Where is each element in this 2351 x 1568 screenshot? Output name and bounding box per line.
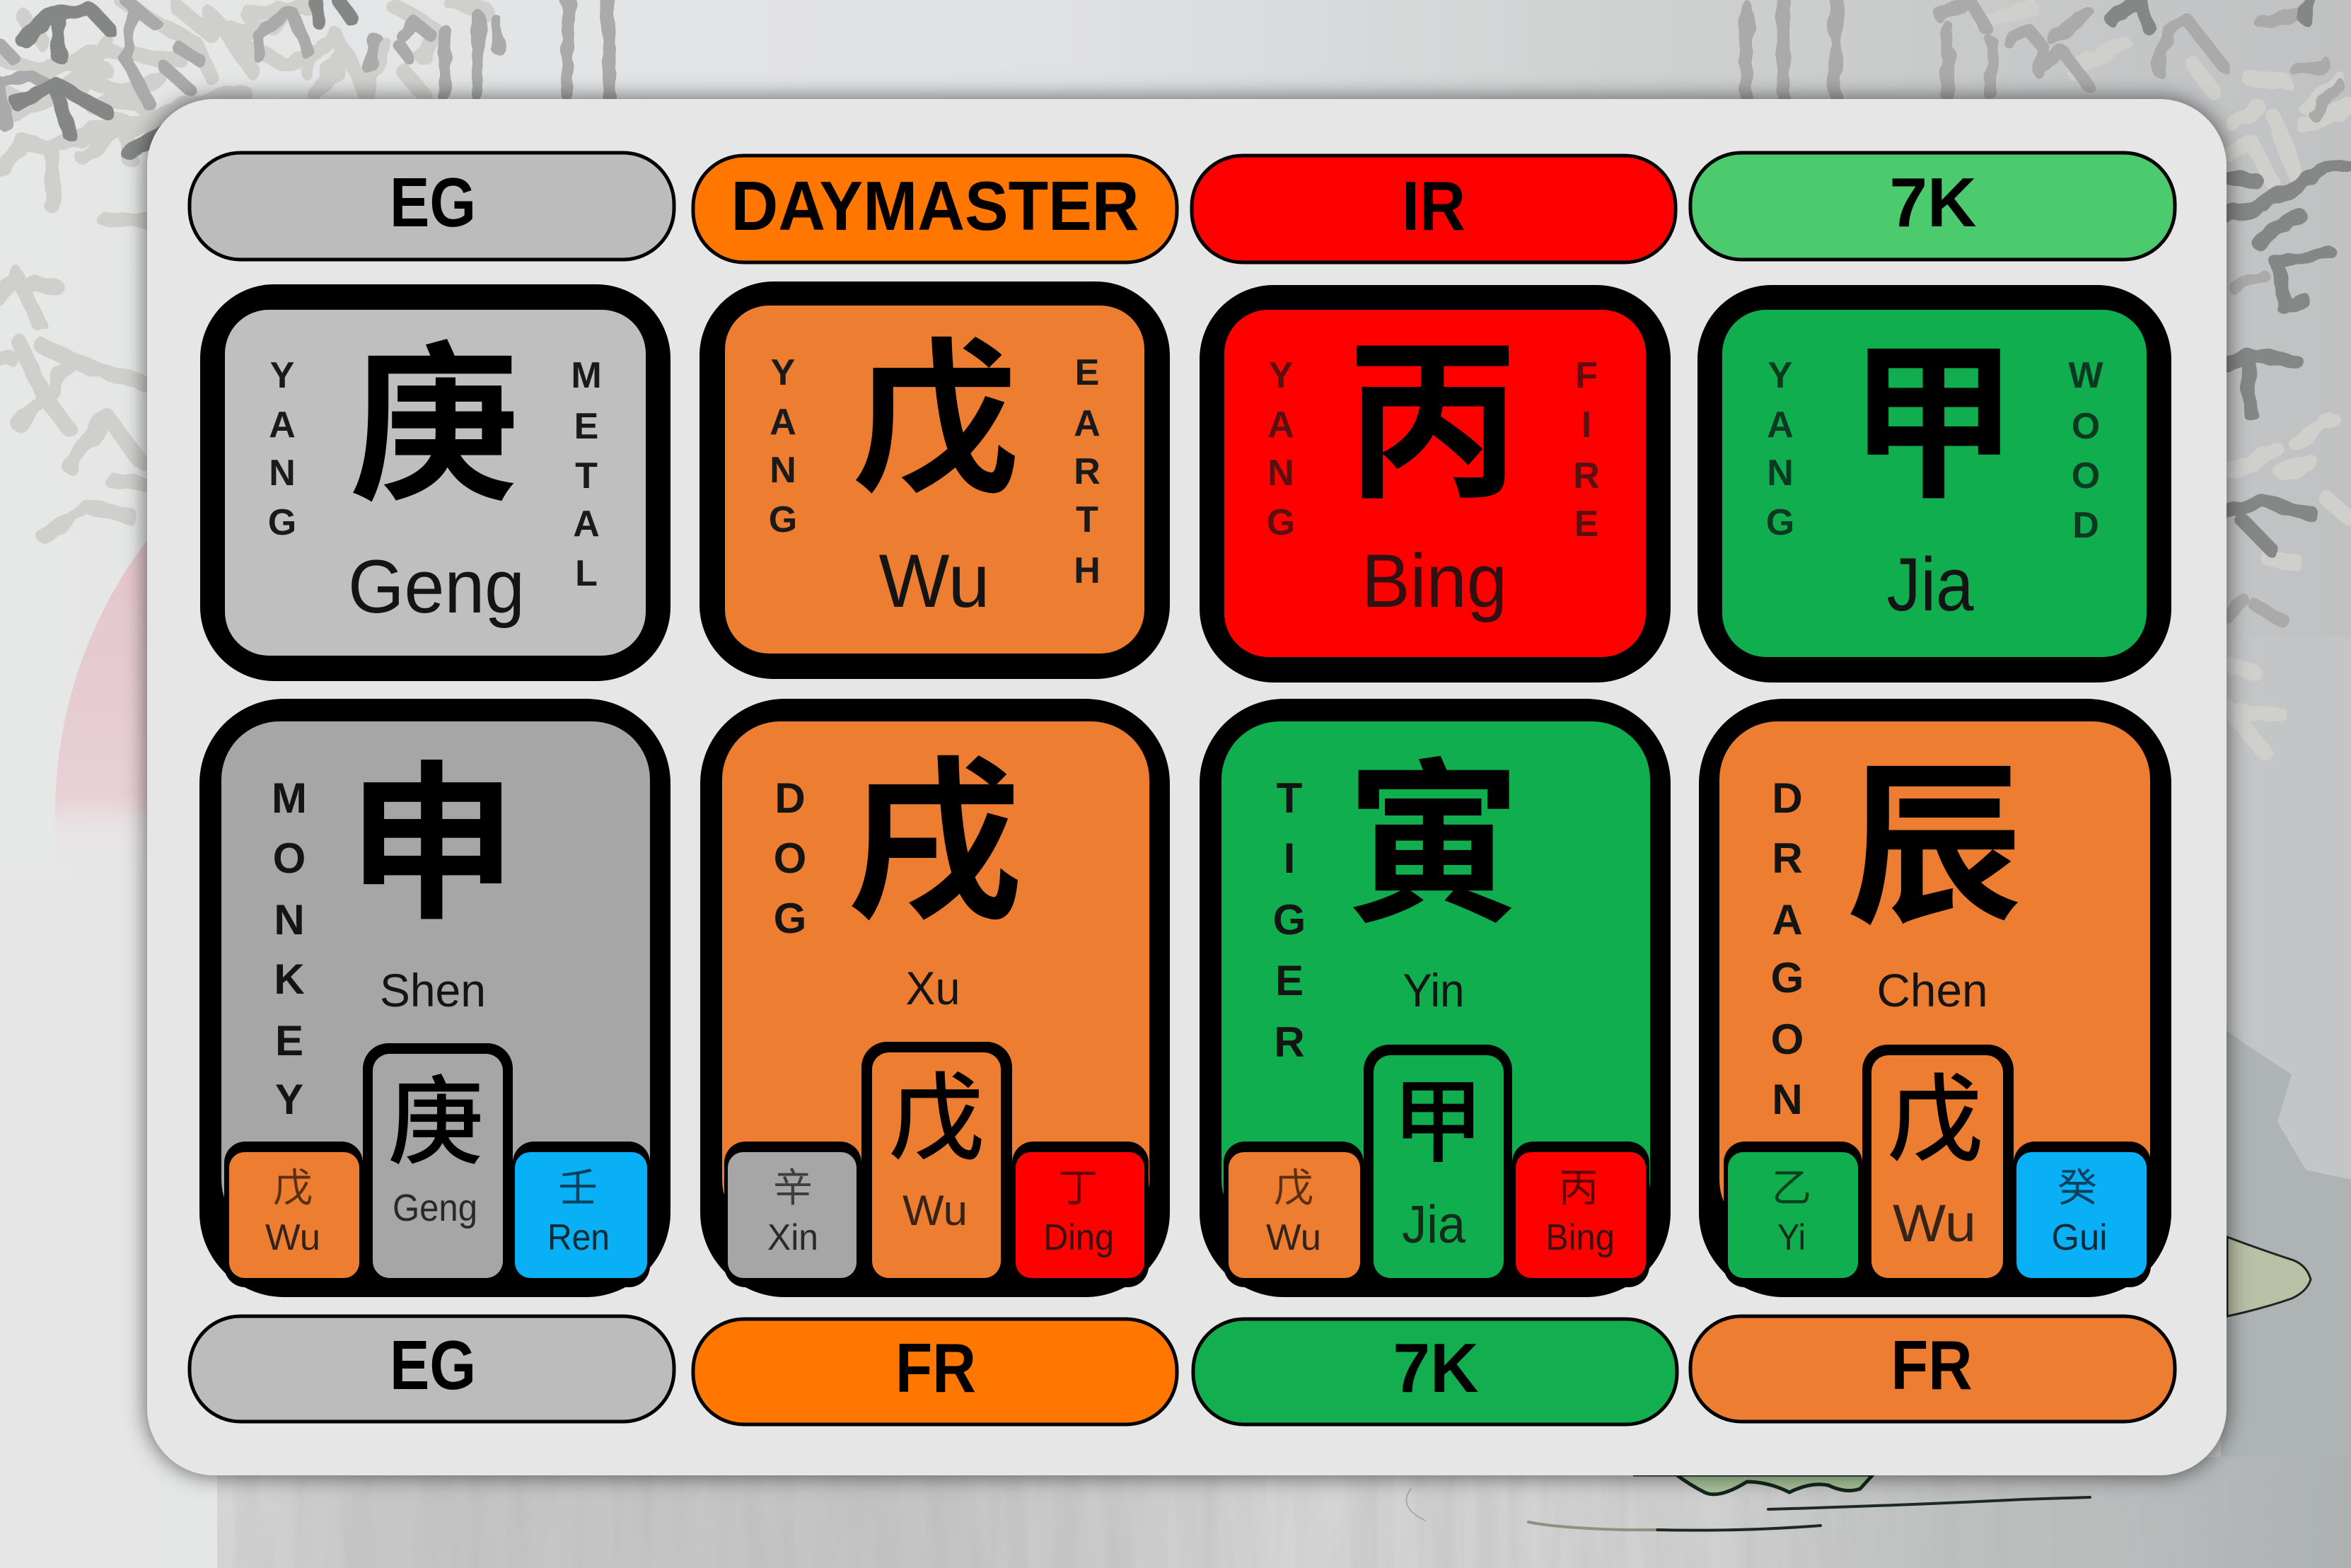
- hidden stem: Yi: [1724, 1142, 1862, 1287]
- top card: Jia: Jia: [1887, 542, 1974, 627]
- hidden stem: Ren: [513, 1142, 650, 1287]
- label: FR: [693, 1319, 1177, 1424]
- label: EG: EG: [390, 1326, 476, 1404]
- hidden stem: Jia: 甲: [1392, 1048, 1484, 1181]
- hidden stem: Ding: [1012, 1142, 1149, 1287]
- top card: Bing: FIRE: [1573, 355, 1600, 545]
- label: FR: FR: [895, 1329, 976, 1407]
- top card: Jia: YANG: [1766, 355, 1794, 543]
- top card: Bing: YANG: [1267, 355, 1295, 543]
- hidden stem: Wu: Wu: [902, 1187, 968, 1234]
- hidden stem: Gui: 癸: [2057, 1156, 2097, 1214]
- top card: Jia: 甲: [1848, 287, 2018, 533]
- top card: Geng: METAL: [571, 355, 602, 594]
- label: 7K: [1193, 1319, 1677, 1424]
- hidden stem: Jia: Jia: [1402, 1195, 1465, 1254]
- top card: Wu: YANG: [769, 352, 797, 540]
- top card: Wu: Wu: [878, 538, 990, 623]
- label: EG: [190, 153, 674, 260]
- top card: Geng: YANG: [268, 355, 296, 543]
- label: FR: [1690, 1316, 2175, 1422]
- bottom card: Shen: [199, 699, 671, 1297]
- hidden stem: Wu: 戊: [1274, 1156, 1313, 1214]
- hidden stem: Gui: [2014, 1142, 2151, 1287]
- hidden stem: Wu: [1862, 1042, 2014, 1287]
- hidden stem: Bing: 丙: [1559, 1156, 1598, 1214]
- top card: Wu: 戊: [852, 284, 1019, 526]
- lotus leaf at bottom: [1633, 1475, 1873, 1494]
- bottom card: Xu: [700, 699, 1170, 1297]
- top card: Jia: [1697, 285, 2171, 683]
- hidden stem: Jia: [1364, 1045, 1512, 1287]
- bottom card: Yin: [1200, 699, 1671, 1297]
- bottom card: Shen: Shen: [380, 964, 486, 1016]
- bottom card: Yin: 寅: [1346, 704, 1521, 958]
- hidden stem: Ren: 壬: [558, 1156, 598, 1214]
- hidden stem: Yi: 乙: [1772, 1156, 1811, 1214]
- water ripple strokes: [1406, 1489, 2090, 1531]
- hidden stem: Geng: 庚: [388, 1045, 484, 1184]
- bottom card: Chen: 辰: [1847, 705, 2022, 959]
- bottom card: Chen: DRAGON: [1771, 774, 1804, 1123]
- hidden stem: Wu: [861, 1040, 1012, 1287]
- label: FR: FR: [1891, 1326, 1972, 1404]
- hidden stem: Wu: 戊: [1887, 1042, 1983, 1180]
- label: 7K: [1690, 153, 2175, 260]
- label: IR: IR: [1402, 167, 1465, 245]
- hidden stem: Geng: [363, 1043, 513, 1287]
- bottom card: Yin: TIGER: [1273, 774, 1306, 1066]
- bottom card: Xu: 戌: [847, 701, 1022, 955]
- top card: Wu: EARTH: [1074, 352, 1101, 591]
- bamboo foliage, mid layer: [0, 0, 2339, 620]
- bottom card: Shen: 申: [347, 708, 517, 953]
- hidden stem: Wu: Wu: [265, 1217, 320, 1258]
- label: 7K: 7K: [1890, 163, 1976, 241]
- bottom card: Chen: [1699, 699, 2171, 1297]
- hidden stem: Gui: Gui: [2051, 1217, 2108, 1258]
- hidden stem: Wu: 戊: [888, 1040, 985, 1179]
- top label row: [190, 153, 2175, 262]
- top card: Wu: [700, 281, 1170, 679]
- hidden stem: Xin: 辛: [773, 1156, 813, 1214]
- top card: Geng: Geng: [348, 544, 525, 629]
- hidden stem: Bing: [1512, 1142, 1649, 1287]
- hidden stem: Ding: 丁: [1058, 1156, 1098, 1214]
- hidden stem: Geng: Geng: [393, 1187, 477, 1229]
- hidden stem: Ding: Ding: [1043, 1217, 1114, 1258]
- bottom label row: [190, 1316, 2175, 1424]
- label: EG: EG: [390, 163, 476, 241]
- label: DAYMASTER: [693, 156, 1177, 262]
- bottom card: Shen: MONKEY: [272, 774, 307, 1123]
- hidden stem: Yi: Yi: [1777, 1217, 1806, 1258]
- hidden stem: Bing: Bing: [1545, 1217, 1615, 1258]
- bamboo foliage, light layer: [0, 0, 2351, 754]
- top card: Bing: Bing: [1362, 538, 1507, 623]
- label: EG: [190, 1316, 674, 1422]
- label: 7K: 7K: [1393, 1329, 1478, 1407]
- icon: pale red sun: [55, 361, 959, 1265]
- hidden stem: Wu: Wu: [1266, 1217, 1321, 1258]
- top card: Jia: WOOD: [2068, 355, 2103, 546]
- hidden stem: Wu: 戊: [273, 1156, 313, 1214]
- hidden stem: Wu: [1224, 1142, 1364, 1287]
- bottom card: Xu: Xu: [905, 962, 960, 1014]
- bottom card: Chen: Chen: [1877, 964, 1987, 1016]
- lotus leaf at right: [2227, 1237, 2311, 1316]
- label: DAYMASTER: DAYMASTER: [731, 167, 1139, 245]
- hidden stem: Xin: Xin: [767, 1217, 818, 1258]
- top card: Bing: 丙: [1346, 281, 1520, 533]
- top card: Geng: 庚: [349, 289, 519, 535]
- hidden stem: Wu: Wu: [1893, 1194, 1976, 1253]
- hidden stem: Wu: [224, 1142, 363, 1287]
- main panel: [147, 99, 2227, 1475]
- top card: Geng: [200, 284, 671, 681]
- label: IR: [1192, 156, 1676, 262]
- hidden stem: Ren: Ren: [547, 1217, 610, 1258]
- bottom card: Xu: DOG: [774, 774, 806, 942]
- hidden stem: Xin: [724, 1142, 861, 1287]
- bamboo foliage, dark layer: [18, 0, 2351, 549]
- top card: Bing: [1200, 281, 1671, 683]
- bottom card: Yin: Yin: [1403, 964, 1464, 1016]
